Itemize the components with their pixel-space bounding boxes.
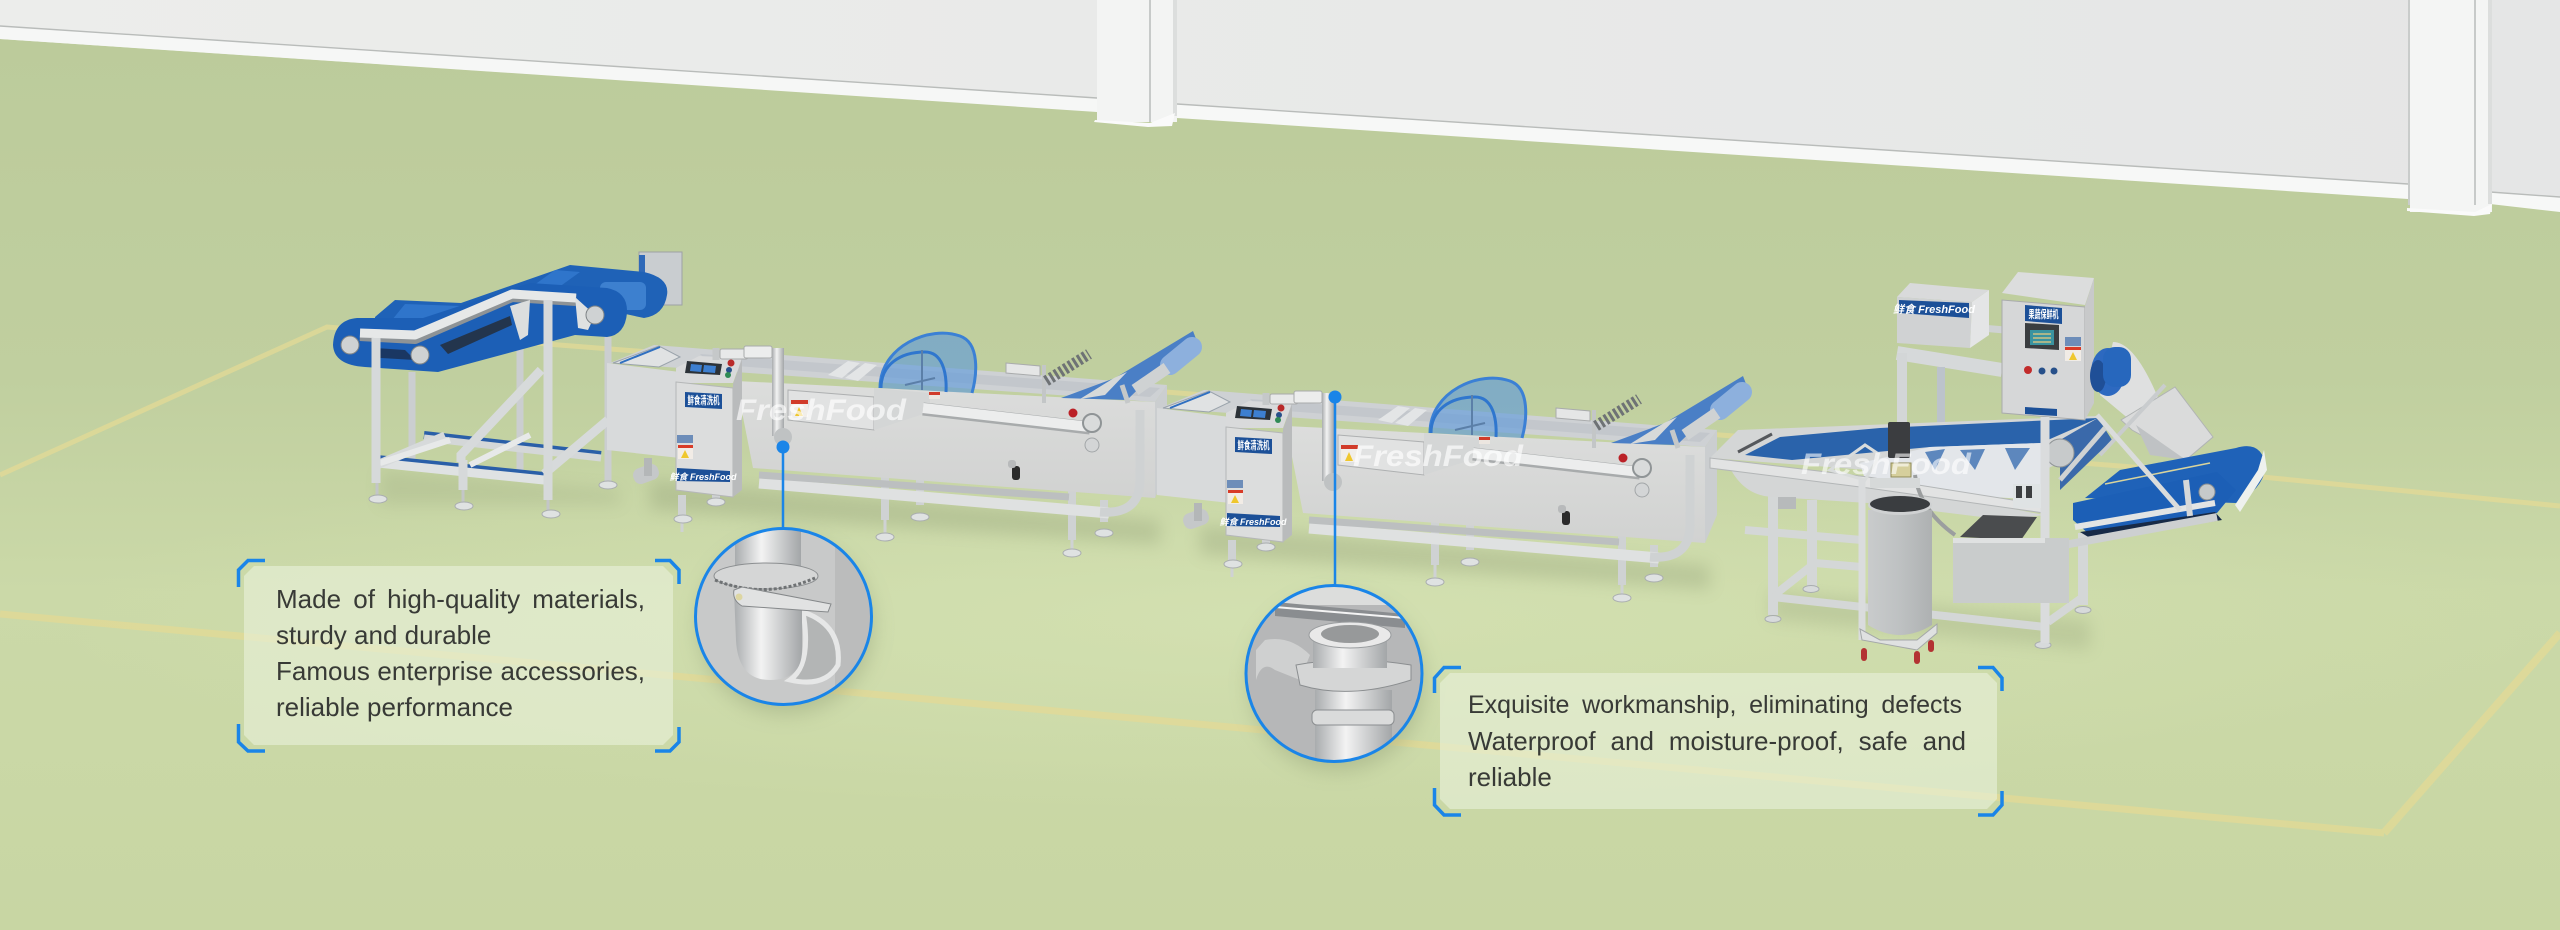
cabinet nameplate: 果蔬保鲜机	[2028, 307, 2058, 321]
infeed conveyor	[333, 252, 682, 518]
text panel right	[1440, 673, 1997, 809]
top box logo: 鲜食 FreshFood	[1893, 303, 1975, 316]
watermark 2: FreshFood	[1353, 440, 1524, 473]
wall pillar right	[2407, 0, 2492, 216]
detail circle: pipe clamp	[695, 528, 875, 714]
callout line 2	[1328, 390, 1342, 585]
watermark 3: FreshFood	[1801, 448, 1972, 481]
left panel text: Made of high-quality materials,	[276, 584, 645, 614]
right panel text: Exquisite workmanship, eliminating defects	[1468, 691, 1962, 719]
skirting boards	[0, 26, 2560, 212]
right panel text: reliable	[1468, 762, 1552, 792]
watermark 1: FreshFood	[736, 394, 907, 427]
text panel left	[244, 566, 673, 745]
floor yellow lines	[0, 327, 2560, 833]
washer 1 nameplate: 鲜食清洗机	[688, 393, 720, 407]
right panel text	[1468, 691, 1966, 792]
left panel text: sturdy and durable	[276, 620, 491, 650]
washer unit 1	[607, 331, 1198, 557]
wall	[0, 0, 2560, 230]
wall pillar left	[1094, 0, 1177, 127]
washer 2 nameplate: 鲜食清洗机	[1238, 438, 1270, 452]
right panel text: Waterproof and moisture-proof, safe and	[1468, 726, 1966, 756]
callout line 1	[776, 440, 790, 528]
sorting and fresh-keeping machine	[1710, 272, 2267, 664]
left panel text: Famous enterprise accessories,	[276, 656, 645, 686]
left panel text: reliable performance	[276, 692, 513, 722]
washer 2 logo plate: 鲜食 FreshFood	[1220, 517, 1287, 527]
left panel text	[276, 584, 645, 722]
washer 1 logo plate: 鲜食 FreshFood	[670, 472, 737, 482]
washer unit 2	[1157, 376, 1748, 602]
floor glow	[50, 430, 2550, 810]
detail circle: pipe flange	[1245, 585, 1425, 771]
